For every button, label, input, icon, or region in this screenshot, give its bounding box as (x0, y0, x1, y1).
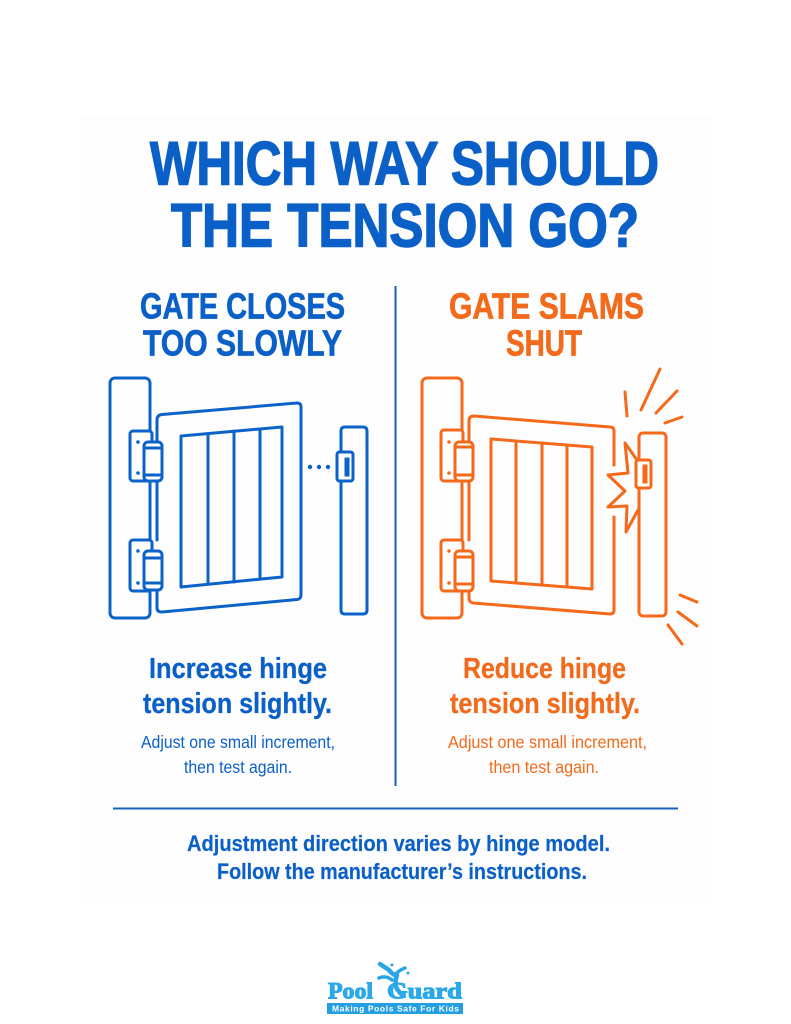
footer note (187, 831, 610, 884)
text: reduce hinge tension: Reduce hinge (463, 653, 626, 685)
horizontal divider (113, 808, 678, 810)
text: adjust instruction: Adjust one small increment, (448, 732, 647, 752)
heading: gate slams shut: SHUT (506, 322, 582, 364)
heading: gate closes too slowly: GATE CLOSES (140, 286, 345, 326)
panel: gate slams shut (422, 286, 697, 777)
text: increase hinge tension: Increase hinge (149, 653, 327, 685)
title (150, 130, 659, 260)
footer note: Adjustment direction varies by hinge model. (187, 831, 610, 856)
panel: gate closes too slowly (110, 286, 367, 777)
title: WHICH WAY SHOULD (150, 130, 659, 198)
text: reduce hinge tension (450, 653, 640, 720)
heading: gate closes too slowly (140, 286, 345, 364)
logo: Pool Guard (327, 964, 463, 1014)
text: increase hinge tension (143, 653, 332, 720)
logo wordmark: Guard (387, 978, 462, 1004)
icon: slamming gate (422, 369, 697, 644)
text: adjust instruction: then test again. (489, 757, 599, 777)
text: adjust instruction: Adjust one small increment, (141, 732, 335, 752)
heading: gate slams shut: GATE SLAMS (449, 286, 644, 326)
vertical divider (394, 286, 396, 786)
title: THE TENSION GO? (171, 192, 639, 260)
icon: slow-closing gate (110, 378, 367, 618)
text: adjust instruction (448, 732, 647, 777)
heading: gate slams shut (449, 286, 644, 364)
text: adjust instruction (141, 732, 335, 777)
text: reduce hinge tension: tension slightly. (450, 688, 640, 720)
text: adjust instruction: then test again. (184, 757, 292, 777)
logo tagline band: Making Pools Safe For Kids (332, 1004, 459, 1014)
logo wordmark: Pool (328, 978, 373, 1004)
footer note: Follow the manufacturer’s instructions. (217, 859, 587, 884)
heading: gate closes too slowly: TOO SLOWLY (143, 322, 342, 364)
text: increase hinge tension: tension slightly. (143, 688, 332, 720)
icon: water splash (379, 964, 410, 996)
logo wordmark (328, 978, 462, 1004)
